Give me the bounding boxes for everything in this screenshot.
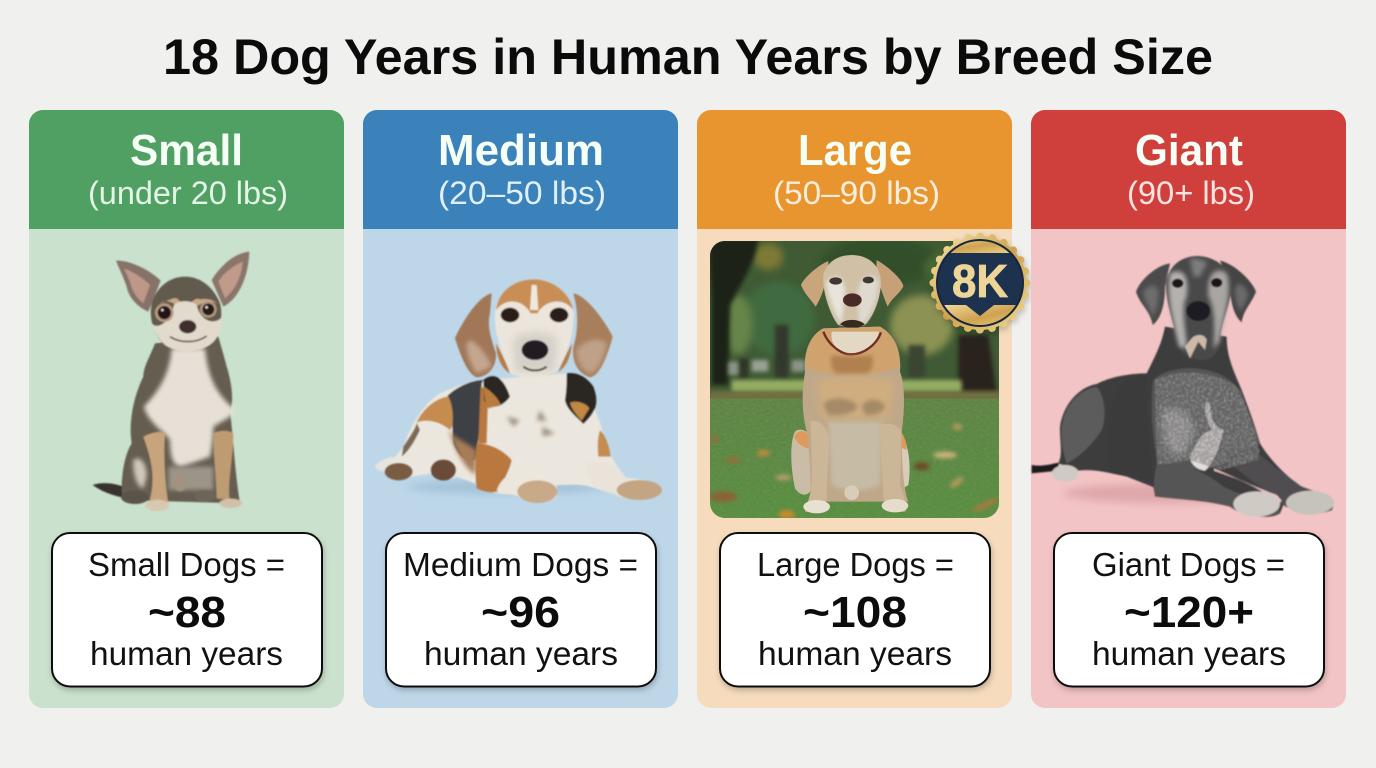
result box: Giant Dogs = xyxy=(1092,546,1285,583)
head xyxy=(1166,256,1232,360)
panel background xyxy=(697,110,1012,708)
weight range: (50–90 lbs) xyxy=(773,175,940,211)
panel: small dogs xyxy=(29,110,344,708)
result box: Large Dogs = xyxy=(757,546,954,583)
head xyxy=(495,279,574,378)
dog photo: chihuahua xyxy=(93,252,249,511)
park background xyxy=(708,238,1002,402)
dog photo: great dane xyxy=(1032,256,1334,517)
dog photo: beagle xyxy=(375,279,662,503)
heading: Medium xyxy=(438,126,604,175)
head xyxy=(151,277,221,350)
ears xyxy=(455,293,496,377)
weight range: (90+ lbs) xyxy=(1127,175,1255,211)
head xyxy=(823,255,881,327)
result box: ~96 xyxy=(481,588,560,637)
weight range: (under 20 lbs) xyxy=(88,175,288,211)
dog photo: labrador in park xyxy=(708,238,1002,521)
heading: Giant xyxy=(1135,126,1243,175)
result box xyxy=(386,533,656,686)
header band xyxy=(363,110,678,229)
panel background xyxy=(1031,110,1346,708)
title: 18 Dog Years in Human Years by Breed Size xyxy=(163,29,1213,85)
result box: human years xyxy=(758,635,952,672)
result box: human years xyxy=(424,635,618,672)
panel: medium dogs xyxy=(363,110,678,708)
ears xyxy=(1136,263,1170,325)
result box: human years xyxy=(1092,635,1286,672)
panel background xyxy=(29,110,344,708)
panel: giant dogs xyxy=(1031,110,1346,708)
result box xyxy=(1054,533,1324,686)
result box: human years xyxy=(90,635,283,672)
result box: ~120+ xyxy=(1124,588,1254,637)
panel: large dogs xyxy=(697,110,1030,708)
weight range: (20–50 lbs) xyxy=(438,175,606,211)
ears xyxy=(801,261,828,307)
header band xyxy=(1031,110,1346,229)
labrador xyxy=(791,255,910,513)
heading: Large xyxy=(798,126,912,175)
result box: ~108 xyxy=(803,588,907,637)
icon: 8K gold badge xyxy=(930,236,1030,330)
heading: Small xyxy=(130,126,243,175)
panel background xyxy=(363,110,678,708)
result box xyxy=(52,533,322,686)
header band xyxy=(29,110,344,229)
result box: ~88 xyxy=(148,588,226,637)
result box: Small Dogs = xyxy=(88,546,285,583)
ears xyxy=(116,261,161,312)
result box: Medium Dogs = xyxy=(403,546,638,583)
result box xyxy=(720,533,990,686)
header band xyxy=(697,110,1012,229)
icon: 8K gold badge: 8K xyxy=(952,255,1008,307)
